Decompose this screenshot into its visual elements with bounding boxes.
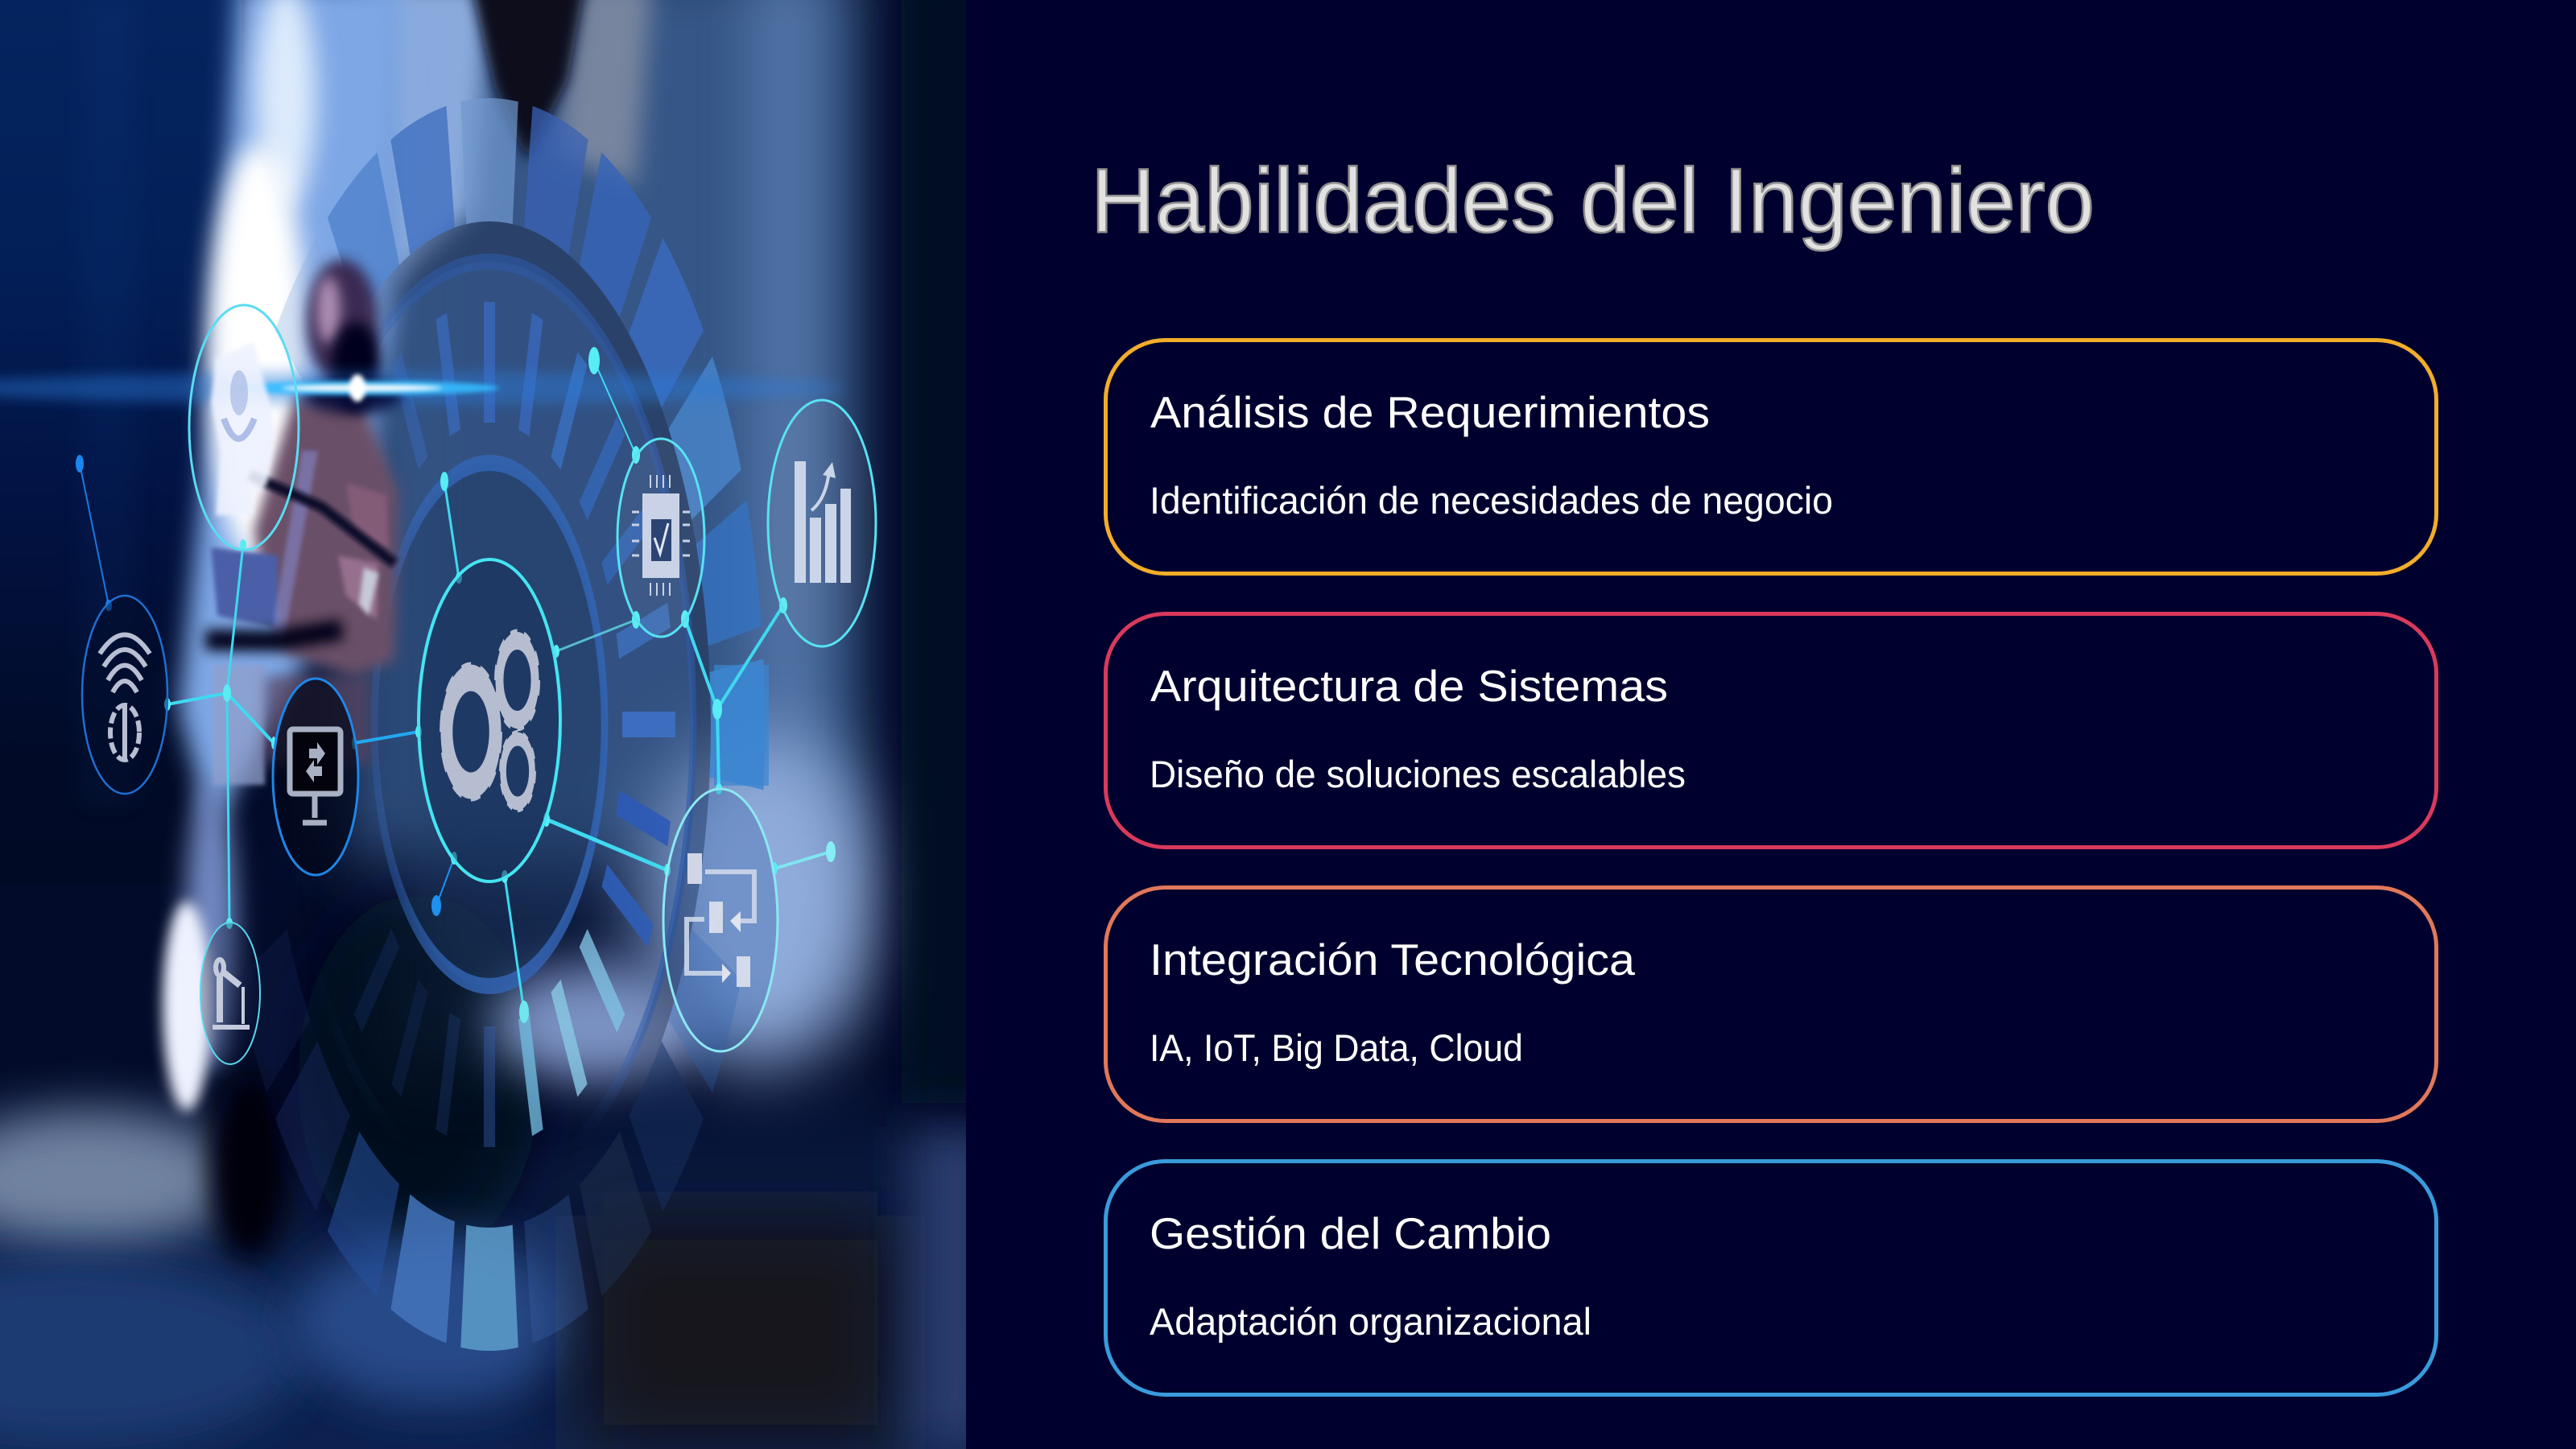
card heading: Gestión del Cambio [1150,1208,1551,1258]
card description: Diseño de soluciones escalables [1150,753,1686,795]
card description: Adaptación organizacional [1150,1300,1591,1343]
icon: process flow circle [663,789,778,1051]
icon: chip with check [617,439,704,637]
fan block behind flow icon [714,665,769,786]
title: Habilidades del Ingeniero [1091,150,2095,251]
card heading: Integración Tecnológica [1150,935,1635,985]
card heading: Análisis de Requerimientos [1150,387,1710,437]
card: Gestión del Cambio [1106,1161,2436,1394]
hand with fingers [205,259,398,785]
card description: IA, IoT, Big Data, Cloud [1150,1026,1523,1069]
gear medium [496,632,539,729]
navy upper left backdrop [0,0,242,704]
dial inner ticks [354,302,675,1147]
dial rings masked fading to the left and bottom [349,221,711,1109]
dial outer segments [237,98,765,1351]
icon: robot arm [200,923,260,1064]
icon: monitor with arrows [273,679,358,875]
card: Integración Tecnológica [1106,887,2436,1121]
bright arm strip [179,0,402,829]
icon: gears circle [419,559,560,881]
icon: head with gear [189,305,299,550]
network connector lines [80,361,831,1012]
horizontal light flare [0,372,845,414]
gear large [441,666,501,798]
blurred body central colour [346,0,861,861]
holographic dial segments and ticks [237,98,765,1351]
lower blurred shapes [0,0,1030,1449]
gear small [500,733,535,810]
photo base [0,765,887,1101]
photo panel: engineer touching holographic network [0,0,1030,1449]
card description: Identificación de necesidades de negocio [1150,479,1833,522]
icon: rising bar chart [768,400,876,646]
network nodes [76,347,836,1023]
card heading: Arquitectura de Sistemas [1150,661,1668,711]
icon: wifi brain [82,596,167,794]
card: Análisis de Requerimientos [1106,340,2436,573]
card: Arquitectura de Sistemas [1106,613,2436,847]
